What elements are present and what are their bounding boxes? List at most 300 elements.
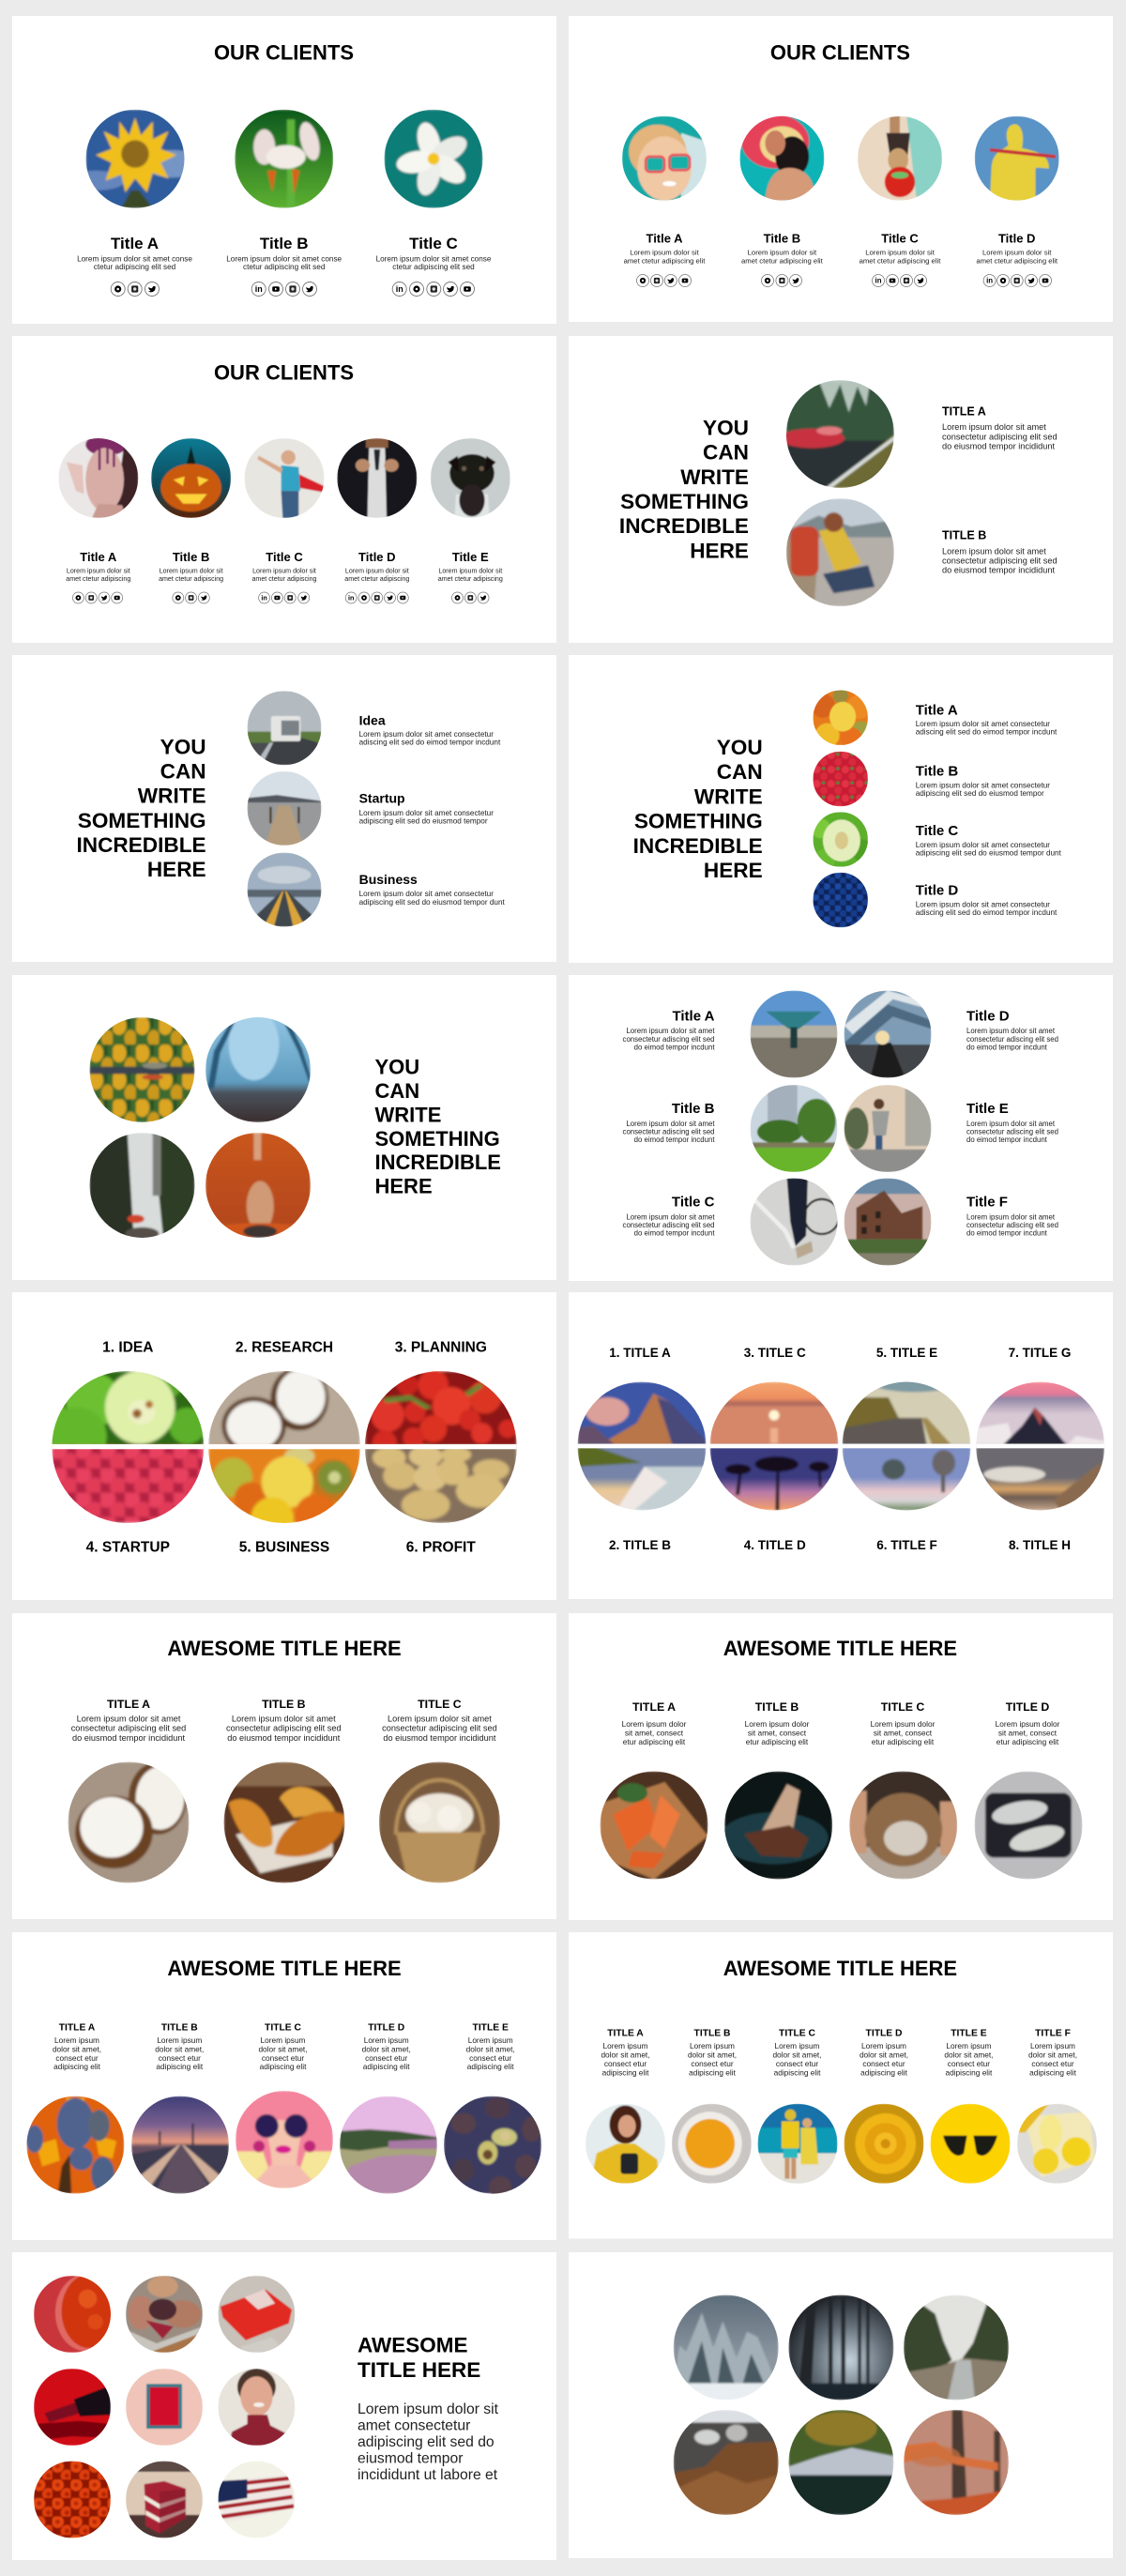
- text: Title D: Lorem ipsum dolor: [996, 1719, 1060, 1729]
- text: Title D: TITLE D: [368, 2023, 404, 2033]
- panel: awesome title, six circles: [569, 1932, 1113, 2239]
- text: Title A: TITLE A: [607, 2029, 644, 2039]
- photo circle: brown mountain: [674, 2410, 779, 2515]
- panel: our clients, three circles: [12, 16, 556, 324]
- social icons A: [111, 282, 160, 297]
- text: Title D: consectetur adiscing elit sed: [966, 1035, 1058, 1044]
- photo circle: woman with pink hair: [236, 2091, 333, 2188]
- labels: bottom row: [86, 1539, 476, 1555]
- text: Idea: [359, 712, 501, 747]
- text: Title D: dolor sit amet,: [362, 2044, 411, 2053]
- text: Title A: dolor sit amet,: [601, 2050, 650, 2060]
- text: Title F: Title F: [966, 1194, 1008, 1210]
- text: Title C: TITLE C: [265, 2023, 302, 2033]
- text: Title A: Lorem ipsum: [603, 2041, 648, 2050]
- social icons B: [251, 282, 317, 297]
- heading: OUR CLIENTS: [770, 40, 910, 64]
- headline: CAN: [375, 1079, 419, 1103]
- text: Business: Business: [359, 872, 418, 887]
- text: Title B: consectetur adiscing elit sed: [623, 1128, 715, 1136]
- photo circle: pumpkin: [151, 438, 231, 518]
- headline: WRITE: [138, 785, 206, 808]
- text: Title A: amet ctetur adipiscing elit: [624, 256, 706, 265]
- photo circle: smiling woman: [218, 2369, 295, 2446]
- text: Title E: Lorem ipsum: [468, 2035, 513, 2045]
- text: Title D: Lorem ipsum: [861, 2041, 906, 2050]
- photo circle: red gift: [218, 2276, 295, 2353]
- text: Title F: TITLE F: [1035, 2029, 1071, 2039]
- text: Title B: adipiscing elit: [689, 2067, 737, 2077]
- text: Title B: [688, 2029, 737, 2077]
- photo circle: yellow rose: [844, 2104, 923, 2184]
- text: Title C: [382, 1698, 497, 1743]
- labels: top row: 3. TITLE C: [744, 1346, 806, 1360]
- photo circle: mushroom basket: [379, 1762, 500, 1882]
- panel: eight landscape halves: [569, 1292, 1113, 1599]
- text: Title B: TITLE B: [694, 2029, 730, 2039]
- text: Title B: ctetur adipiscing elit sed: [243, 263, 326, 271]
- text: Title A: Lorem ipsum dolor sit: [630, 249, 700, 257]
- headline: INCREDIBLE: [619, 514, 749, 538]
- text: Title E: do eimod tempor incdunt: [966, 1136, 1048, 1144]
- text: Title B: Lorem ipsum: [690, 2041, 735, 2050]
- headline: YOU: [717, 736, 763, 759]
- text: Title E: dolor sit amet,: [944, 2050, 993, 2060]
- text: Title C: TITLE C: [881, 1700, 924, 1714]
- text: Title C: TITLE C: [418, 1698, 462, 1711]
- text: Title B: adipiscing elit: [156, 2062, 204, 2071]
- photo circle: man on scooter: [844, 1085, 931, 1172]
- photo circle: lily: [235, 110, 333, 208]
- text: Title D: [344, 550, 409, 583]
- heading: AWESOME: [358, 2334, 468, 2357]
- photo circle: sunflower: [86, 109, 184, 208]
- labels: top row: 1. IDEA: [102, 1339, 153, 1355]
- text: Title A: [942, 404, 1058, 451]
- text: Title A: TITLE A: [107, 1698, 150, 1711]
- text: Title E: [438, 550, 503, 583]
- text: Title D: amet ctetur adipiscing: [344, 575, 409, 583]
- headline: HERE: [375, 1175, 433, 1198]
- text: Title C: Lorem ipsum: [775, 2041, 820, 2050]
- heading: OUR CLIENTS: [214, 40, 354, 64]
- text: Title B: dolor sit amet,: [155, 2044, 204, 2053]
- text: Title A: [53, 2023, 101, 2071]
- text: Title A: [916, 702, 1058, 737]
- text: Title D: consect etur: [862, 2059, 905, 2068]
- text: Title B: Title B: [916, 763, 958, 779]
- text: Title A: consect etur: [604, 2059, 647, 2068]
- text: Title D: dolor sit amet,: [860, 2050, 908, 2060]
- text: Title C: Title C: [409, 235, 458, 252]
- photo circle: blue foggy forest: [205, 1009, 311, 1122]
- panel: awesome title, four circles: [569, 1613, 1113, 1920]
- text: Title E: consectetur adiscing elit sed: [966, 1128, 1058, 1136]
- text: Title A: Title A: [916, 702, 958, 718]
- text: Title F: Lorem ipsum dolor sit amet: [966, 1212, 1056, 1221]
- text: Title B: [916, 763, 1050, 798]
- text: Startup: Lorem ipsum dolor sit amet consectetur: [359, 809, 494, 817]
- split circle: rock mountain and beach: [578, 1381, 706, 1511]
- split circle: peak above clouds and sunset cliff: [976, 1381, 1104, 1511]
- photo circle: strawberries: [813, 752, 868, 806]
- text: Title E: Title E: [452, 550, 489, 564]
- text: Business: [359, 872, 506, 907]
- text: Title D: adipiscing elit: [363, 2062, 410, 2071]
- text: Title D: [996, 1700, 1060, 1746]
- text: Title A: [601, 2029, 650, 2077]
- text: Title C: amet ctetur adipiscing elit: [860, 256, 941, 265]
- text: Title A: Title A: [111, 235, 159, 252]
- text: Title D: TITLE D: [866, 2029, 902, 2039]
- photo circle: american flag: [218, 2461, 295, 2538]
- photo circle: pier shelter: [751, 991, 837, 1077]
- split circle: sunset sea and palms: [709, 1381, 839, 1511]
- text: Title F: consectetur adiscing elit sed: [966, 1221, 1058, 1229]
- labels: bottom row: 4. STARTUP: [86, 1539, 170, 1555]
- photo circle: orange soup: [672, 2104, 752, 2184]
- body text: incididunt ut labore et: [358, 2467, 498, 2483]
- text: Title B: amet ctetur adipiscing elit: [741, 256, 824, 265]
- text: Title D: [362, 2023, 411, 2071]
- text: Title D: Title D: [916, 883, 958, 899]
- panel: awesome title, five circles: [12, 1932, 556, 2240]
- text: Title B: Title B: [173, 550, 209, 564]
- text: Title E: TITLE E: [951, 2029, 987, 2039]
- labels: bottom row: 5. BUSINESS: [239, 1539, 329, 1555]
- text: Title D: Title D: [358, 550, 396, 564]
- photo circle: croissants: [223, 1762, 345, 1882]
- text: Title B: Title B: [260, 235, 309, 252]
- text: Title A: [71, 1698, 186, 1743]
- text: Title D: TITLE D: [1006, 1700, 1049, 1714]
- panel: six food halves: [12, 1292, 556, 1600]
- labels: bottom row: 6. PROFIT: [406, 1539, 476, 1555]
- text: Title A: amet ctetur adipiscing: [66, 575, 130, 583]
- text: Title D: [966, 1008, 1058, 1052]
- text: Title D: Lorem ipsum dolor sit: [345, 568, 409, 575]
- headline: CAN: [717, 760, 763, 784]
- headline: HERE: [690, 539, 749, 562]
- text: Title B: TITLE B: [161, 2023, 198, 2033]
- text: Title A: Lorem ipsum dolor sit: [67, 568, 130, 575]
- text: Title D: adipiscing elit: [860, 2067, 908, 2077]
- split circle: apples and raspberries: [46, 1362, 205, 1523]
- text: Title B: Title B: [764, 231, 800, 246]
- text: Title A: [623, 1008, 715, 1052]
- text: Title A: sit amet, consect: [625, 1729, 684, 1738]
- text: Title A: consectetur adiscing elit sed: [623, 1035, 715, 1044]
- text: Title C: consectetur adipiscing elit sed: [382, 1724, 497, 1733]
- headline: WRITE: [680, 465, 749, 489]
- text: Title A: consect etur: [55, 2053, 99, 2063]
- headline: YOU: [703, 416, 749, 439]
- text: Title B: TITLE B: [942, 529, 986, 542]
- panel: nine red circles with text: [12, 2252, 556, 2560]
- panel: two circles with headline: [569, 336, 1113, 643]
- headline: CAN: [703, 441, 749, 465]
- photo circle: coconut: [68, 1762, 190, 1882]
- heading: AWESOME TITLE HERE: [723, 1637, 957, 1660]
- text: Title A: Lorem ipsum dolor sit amet conse: [77, 255, 192, 263]
- body text: adipiscing elit sed do: [358, 2434, 495, 2450]
- text: Title D: Title D: [966, 1008, 1010, 1024]
- text: Title B: Lorem ipsum dolor: [745, 1719, 810, 1729]
- social icons row: [636, 274, 1052, 287]
- photo circle: mountain river: [904, 2295, 1009, 2401]
- heading: OUR CLIENTS: [214, 360, 354, 385]
- text: Title B: Lorem ipsum dolor sit: [748, 249, 817, 257]
- text: Title A: TITLE A: [942, 404, 986, 418]
- text: Title B: Lorem ipsum dolor sit amet: [232, 1714, 336, 1723]
- headline: HERE: [147, 858, 206, 881]
- photo circle: hands with cup: [126, 2276, 203, 2353]
- headline: HERE: [704, 859, 763, 882]
- labels: top row: 2. RESEARCH: [236, 1339, 333, 1355]
- social icons C: in: [396, 284, 403, 294]
- text: Title B: Lorem ipsum dolor sit amet: [942, 546, 1046, 556]
- text: Startup: Startup: [359, 790, 405, 805]
- headline: YOU: [160, 736, 206, 758]
- text: Title B: consect etur: [159, 2053, 201, 2063]
- text: Title C: consectetur adiscing elit sed: [623, 1221, 715, 1229]
- panel: our clients, five circles: [12, 336, 556, 643]
- headline: SOMETHING: [78, 809, 206, 832]
- text: Title C: dolor sit amet,: [258, 2044, 308, 2053]
- text: Title D: adiscing elit sed do eimod tempor incdunt: [916, 908, 1058, 917]
- text: Title B: [745, 1700, 810, 1746]
- text: Title B: etur adipiscing elit: [746, 1737, 809, 1746]
- text: Title B: TITLE B: [755, 1700, 799, 1714]
- text: Title C: [871, 1700, 936, 1746]
- text: Title C: Lorem ipsum dolor: [871, 1719, 936, 1729]
- text: Title B: do eiusmod tempor incididunt: [942, 566, 1055, 575]
- text: Title F: adipiscing elit: [1029, 2067, 1077, 2077]
- text: Title C: Lorem ipsum dolor sit amet: [626, 1212, 715, 1221]
- text: Title D: Lorem ipsum: [364, 2035, 409, 2045]
- photo circle: beach couple: [758, 2104, 837, 2184]
- text: Title E: TITLE E: [473, 2023, 509, 2033]
- text: Title B: Lorem ipsum: [157, 2035, 202, 2045]
- text: Title C: do eimod tempor incdunt: [634, 1229, 715, 1238]
- text: Title B: do eiusmod tempor incididunt: [227, 1733, 341, 1743]
- text: Startup: adipiscing elit sed do eiusmod tempor: [359, 816, 488, 826]
- photo circle: white flower on teal: [385, 110, 482, 208]
- text: Title B: adipiscing elit sed do eiusmod tempor: [916, 789, 1044, 798]
- text: Title B: amet ctetur adipiscing: [159, 575, 223, 583]
- text: Title A: TITLE A: [59, 2023, 96, 2033]
- text: Title F: [966, 1194, 1058, 1238]
- text: Title A: do eiusmod tempor incididunt: [72, 1733, 185, 1743]
- text: Title C: [251, 550, 317, 583]
- headline: WRITE: [694, 785, 763, 808]
- text: Title D: amet ctetur adipiscing elit: [976, 256, 1058, 265]
- text: Business: adipiscing elit sed do eiusmod tempor dunt: [359, 898, 506, 907]
- text: Idea: adiscing elit sed do eimod tempor incdunt: [359, 739, 501, 747]
- text: Title E: adipiscing elit: [467, 2062, 514, 2071]
- text: Title F: consect etur: [1031, 2059, 1074, 2068]
- text: Title A: Title A: [646, 231, 683, 246]
- panel: our clients, four circles: [569, 16, 1113, 322]
- text: Title A: adipiscing elit: [53, 2062, 101, 2071]
- photo circle: green apple: [813, 812, 868, 867]
- labels: bottom row: 8. TITLE H: [1009, 1538, 1071, 1552]
- labels: top row: 3. PLANNING: [395, 1339, 487, 1355]
- text: Title D: do eimod tempor incdunt: [966, 1044, 1048, 1052]
- social icons C: [392, 282, 475, 297]
- text: Title C: Lorem ipsum dolor sit amet consectetur: [916, 841, 1050, 849]
- photo circle: painted face: [58, 434, 138, 518]
- headline: INCREDIBLE: [77, 833, 206, 857]
- heading: TITLE HERE: [358, 2358, 480, 2382]
- text: Title E: Title E: [966, 1101, 1009, 1117]
- text: Title C: dolor sit amet,: [772, 2050, 822, 2060]
- text: Title B: sit amet, consect: [748, 1729, 807, 1738]
- text: Title C: ctetur adipiscing elit sed: [392, 263, 475, 271]
- text: Title A: consectetur adipiscing elit sed: [942, 432, 1058, 441]
- photo circle: grapes and autumn leaves: [25, 2096, 124, 2194]
- text: Title A: Lorem ipsum dolor: [622, 1719, 687, 1729]
- text: Title A: [622, 1700, 687, 1746]
- panel: four stacked fruit circles: [569, 655, 1113, 963]
- text: Title B: Lorem ipsum dolor sit amet conse: [226, 255, 342, 263]
- text: Title A: etur adipiscing elit: [623, 1737, 686, 1746]
- text: Startup: [359, 790, 494, 826]
- photo circle: child in sunglasses: [622, 116, 707, 201]
- text: Title F: dolor sit amet,: [1028, 2050, 1077, 2060]
- social icons row: [72, 592, 489, 603]
- text: Title A: consectetur adipiscing elit sed: [71, 1724, 186, 1733]
- text: Title E: consect etur: [948, 2059, 990, 2068]
- headline: SOMETHING: [375, 1127, 500, 1151]
- photo circle: woman in red hat: [739, 114, 824, 201]
- text: Title C: Title C: [881, 231, 919, 246]
- text: Title B: [942, 529, 1058, 575]
- photo circle: red car in forest: [780, 380, 894, 488]
- text: Title B: consectetur adipiscing elit sed: [226, 1724, 342, 1733]
- headline: SOMETHING: [634, 810, 763, 833]
- photo circle: wine on red silk: [34, 2369, 111, 2446]
- text: Title A: Lorem ipsum dolor sit amet: [626, 1027, 715, 1035]
- text: Title C: amet ctetur adipiscing: [251, 575, 317, 583]
- text: Title A: Lorem ipsum dolor sit amet: [77, 1714, 181, 1723]
- text: Title C: [916, 823, 1062, 857]
- text: Title D: [916, 883, 1058, 917]
- headline: SOMETHING: [620, 490, 749, 513]
- text: Title A: do eimod tempor incdunt: [634, 1044, 715, 1052]
- labels: top row: 1. TITLE A: [609, 1346, 671, 1360]
- text: Title C: Title C: [266, 550, 303, 564]
- text: Idea: Lorem ipsum dolor sit amet consectetur: [359, 730, 494, 739]
- text: Title C: Lorem ipsum dolor sit amet conse: [376, 255, 492, 263]
- headline: YOU: [375, 1056, 419, 1079]
- text: Title B: dolor sit amet,: [688, 2050, 737, 2060]
- text: Title E: adipiscing elit: [945, 2067, 993, 2077]
- body text: Lorem ipsum dolor sit: [358, 2401, 499, 2417]
- text: Title D: consect etur: [365, 2053, 408, 2063]
- photo circle: rail tracks at sunset: [131, 2096, 229, 2194]
- social icons B: in: [255, 284, 263, 294]
- photo circle: woman with camera: [586, 2104, 665, 2184]
- text: Title E: [944, 2029, 993, 2077]
- photo circle: child with red cape: [244, 438, 325, 518]
- photo circle: heather field: [340, 2096, 437, 2194]
- headline: WRITE: [375, 1103, 441, 1126]
- text: Title B: consect etur: [691, 2059, 734, 2068]
- text: Business: Lorem ipsum dolor sit amet consectetur: [359, 890, 494, 898]
- text: Title B: [226, 235, 342, 271]
- social icons row: in: [348, 593, 354, 602]
- photo circle: woman lying down: [858, 116, 942, 201]
- labels: bottom row: 6. TITLE F: [876, 1538, 937, 1552]
- text: Title F: Lorem ipsum: [1030, 2041, 1075, 2050]
- text: Title A: Lorem ipsum: [54, 2035, 99, 2045]
- labels: top row: 7. TITLE G: [1009, 1346, 1071, 1360]
- labels: bottom row: 4. TITLE D: [744, 1538, 806, 1552]
- text: Title D: etur adipiscing elit: [997, 1737, 1059, 1746]
- photo circle: road with yellow lines: [248, 852, 321, 927]
- text: Title A: dolor sit amet,: [53, 2044, 101, 2053]
- text: Title B: [159, 550, 223, 583]
- text: Title A: [66, 550, 130, 583]
- text: Title B: Title B: [672, 1101, 715, 1117]
- text: Title B: TITLE B: [262, 1698, 306, 1711]
- photo circle: bread: [849, 1772, 957, 1879]
- text: Title A: [77, 235, 192, 271]
- photo circle: sunglasses on yellow: [931, 2104, 1010, 2184]
- photo circle: steak: [721, 1772, 832, 1879]
- photo circle: yellow raincoat: [975, 116, 1059, 201]
- photo circle: wooden pier: [248, 771, 321, 846]
- text: Title D: [860, 2029, 908, 2077]
- photo circle: waterfall: [90, 1133, 195, 1240]
- photo circle: avocado on navy: [444, 2096, 541, 2200]
- text: Title D: sit amet, consect: [998, 1729, 1058, 1738]
- labels: top row: [609, 1346, 1071, 1360]
- text: Title B: Lorem ipsum dolor sit amet consectetur: [916, 781, 1050, 789]
- text: Title A: [624, 231, 706, 265]
- photo circle: man in suit: [337, 438, 417, 518]
- labels: bottom row: [609, 1538, 1071, 1552]
- text: Title E: [966, 1101, 1058, 1144]
- text: Title C: [623, 1194, 715, 1238]
- text: Title C: adipiscing elit: [260, 2062, 307, 2071]
- text: Title C: [860, 231, 941, 265]
- text: Title C: Lorem ipsum dolor sit: [252, 568, 316, 575]
- photo circle: blueberries: [813, 873, 868, 927]
- text: Title E: [466, 2023, 515, 2071]
- labels: top row: 5. TITLE E: [876, 1346, 937, 1360]
- text: Title C: Lorem ipsum dolor sit amet: [388, 1714, 492, 1723]
- photo circle: foggy valley: [788, 2410, 893, 2515]
- text: Title B: consectetur adipiscing elit sed: [942, 556, 1058, 565]
- split circle: coastal road and foggy tree: [843, 1372, 970, 1511]
- text: Title D: Lorem ipsum dolor sit amet: [966, 1027, 1056, 1035]
- text: Title C: consect etur: [776, 2059, 818, 2068]
- photo circle: dark misty forest: [788, 2295, 893, 2401]
- text: Title A: ctetur adipiscing elit sed: [94, 263, 176, 271]
- photo circle: red bowl: [34, 2274, 117, 2353]
- text: Title D: [976, 231, 1058, 265]
- text: Title C: Lorem ipsum dolor sit: [865, 249, 936, 257]
- photo circle: camper van: [248, 691, 321, 765]
- text: Title F: [1028, 2029, 1077, 2077]
- headline: CAN: [160, 760, 206, 784]
- text: Title C: etur adipiscing elit: [872, 1737, 935, 1746]
- text: Title B: Lorem ipsum dolor sit: [160, 568, 223, 575]
- photo circle: fish tray: [974, 1772, 1083, 1879]
- photo circle: red roses: [34, 2461, 111, 2538]
